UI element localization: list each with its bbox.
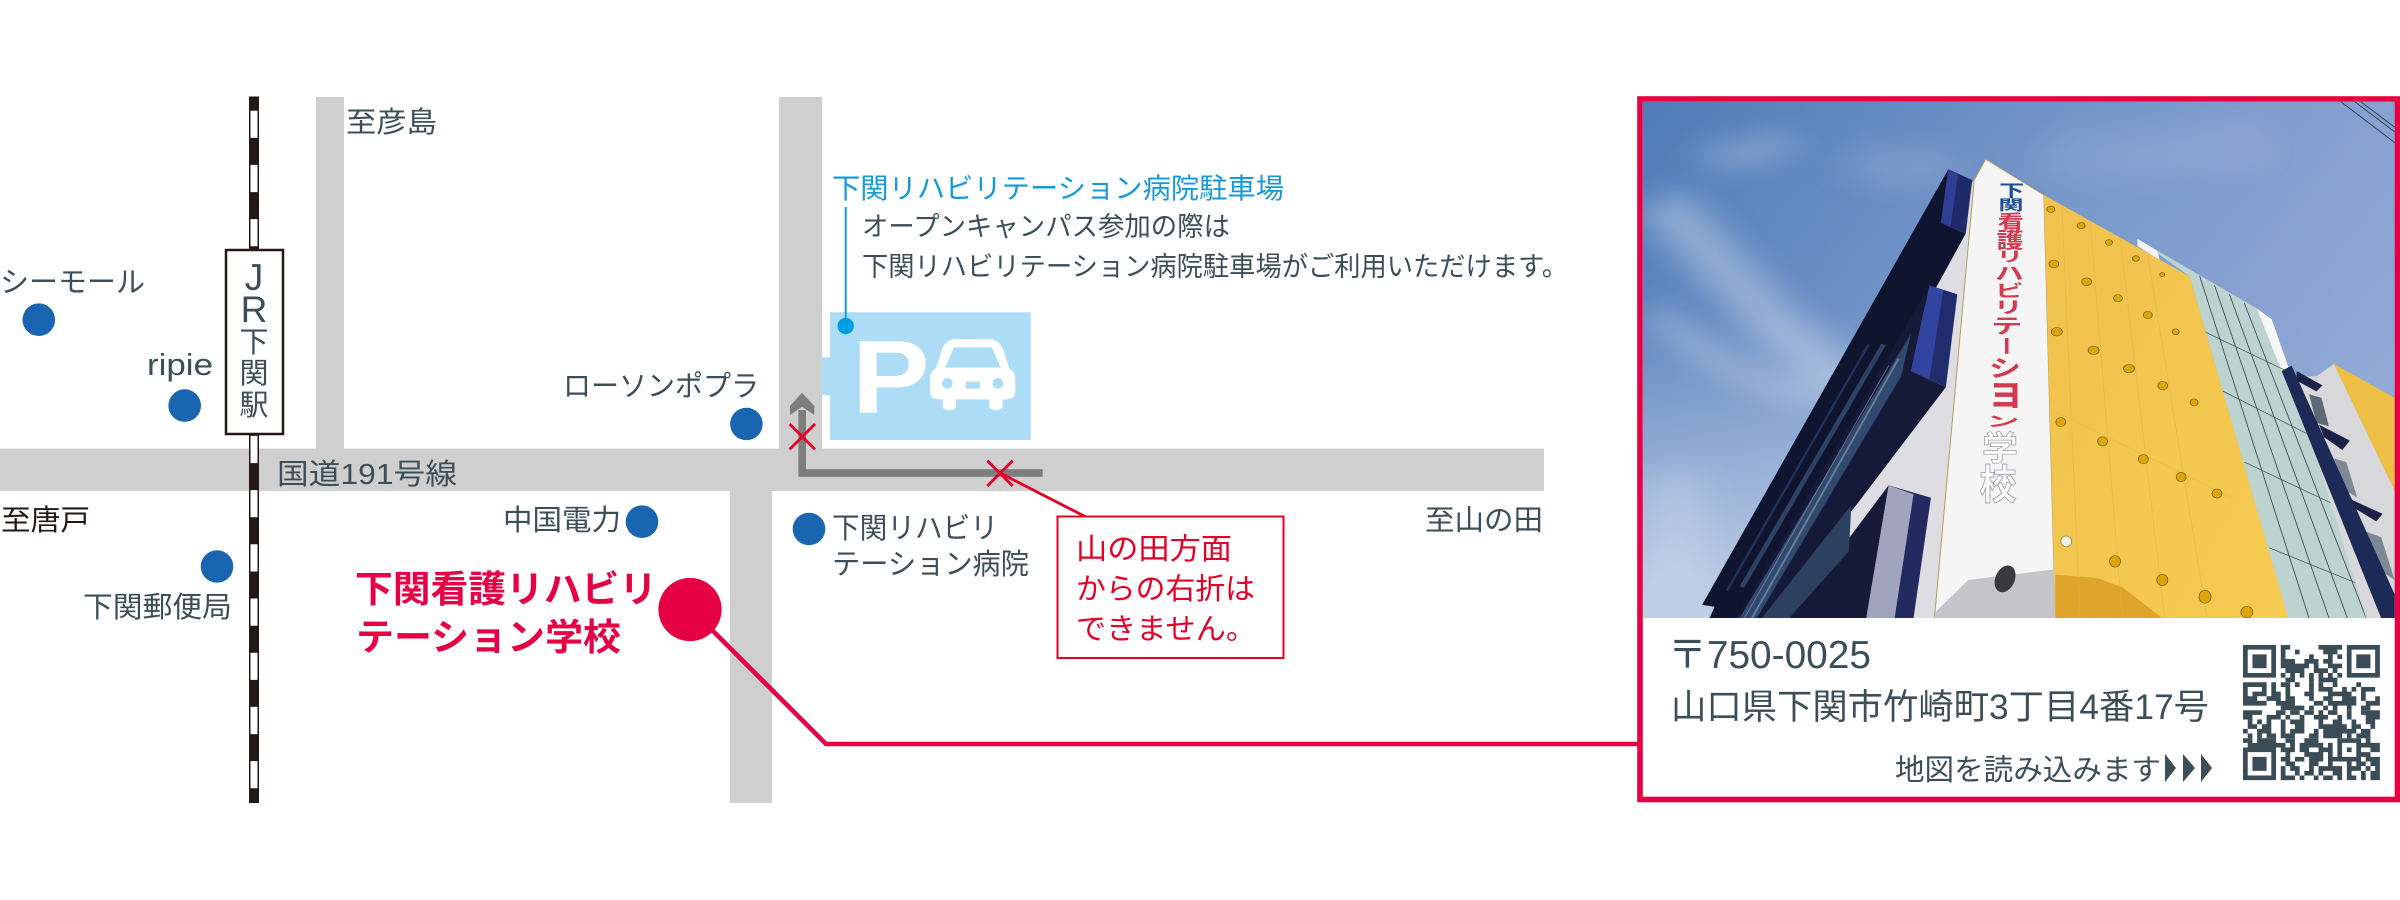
- building sign: リ: [1994, 298, 2023, 316]
- station sign: JR下関駅: J: [245, 257, 263, 298]
- label: ripie with marker: ripie: [147, 347, 213, 382]
- neighbouring building: [2292, 364, 2395, 618]
- dark upper band: [1702, 169, 1966, 618]
- parking pointer: [838, 207, 854, 334]
- address text: 地図を読み込みます: [1895, 754, 2161, 787]
- parking block: [822, 207, 1031, 440]
- callout: no right turn: できません。: [1076, 613, 1256, 646]
- building sign: ン: [1986, 414, 2019, 430]
- building sign: [1979, 183, 2026, 508]
- lower band: [1789, 485, 1889, 618]
- callout: no right turn: 山の田方面: [1076, 533, 1232, 566]
- no-turn mark with leader: [987, 461, 1086, 517]
- building sign: ー: [1992, 336, 2020, 356]
- overhead wires: [2341, 102, 2395, 142]
- label: ローソンポプラ with marker: ローソンポプラ: [563, 370, 759, 403]
- label: シーモール with marker: [0, 267, 145, 336]
- no-entry mark: north road: [790, 424, 815, 449]
- parking note text: [862, 212, 1568, 282]
- band faces: [1941, 169, 1972, 234]
- railway line: [249, 96, 259, 803]
- school marker: [658, 578, 722, 641]
- label: 至彦島: 至彦島: [346, 106, 437, 139]
- panel: school photo and address: [1640, 99, 2398, 800]
- icon: triple arrows: [2165, 754, 2212, 782]
- station sign: JR下関駅: R: [241, 289, 267, 330]
- leader line from school marker to address panel: [690, 608, 1642, 744]
- address text: 山口県下関市竹崎町3丁目4番17号: [1671, 688, 2209, 727]
- school name: 下関看護リハビリ: [355, 569, 657, 610]
- parking note heading: 下関リハビリテーション病院駐車場: [832, 173, 1284, 204]
- station sign: JR下関駅: 下: [239, 327, 269, 359]
- yellow facade: [2044, 195, 2288, 618]
- label: 下関郵便局 with marker: 下関郵便局: [83, 591, 232, 624]
- building sign: 看: [1998, 211, 2024, 232]
- building sign: ョ: [1985, 371, 2026, 414]
- label: 至山の田: 至山の田: [1425, 505, 1543, 537]
- navy column with fins: [2282, 366, 2395, 618]
- station sign: JR下関駅: 駅: [239, 390, 269, 422]
- label: ローソンポプラ with marker: [563, 370, 763, 440]
- building sign: 校: [1979, 463, 2017, 508]
- building sign: ハ: [1995, 264, 2024, 285]
- photo: school building: [1643, 102, 2395, 618]
- parking note text: オープンキャンパス参加の際は: [862, 212, 1230, 242]
- address text: 〒750-0025: [1668, 634, 1871, 677]
- school name: テーション学校: [356, 617, 621, 658]
- security camera: [1994, 566, 2016, 592]
- building sign: ビ: [1995, 282, 2024, 300]
- school name: [355, 569, 657, 658]
- station sign: JR下関駅: [226, 250, 283, 434]
- building sign: 学: [1982, 430, 2018, 468]
- building sign: 関: [1998, 197, 2024, 214]
- address text: [1668, 634, 2209, 787]
- label: 下関リハビリテーション病院 with marker: 下関リハビリ: [832, 513, 998, 545]
- icon: car: [930, 339, 1015, 410]
- route arrow: [790, 393, 1043, 473]
- callout: no right turn: [1058, 516, 1284, 658]
- facade studs: [2047, 206, 2253, 618]
- label: 下関郵便局 with marker: [83, 550, 233, 624]
- station sign: JR下関駅: 関: [239, 358, 269, 390]
- map: road network: [0, 97, 1544, 803]
- building sign: 護: [1997, 228, 2023, 253]
- QR code: [2243, 645, 2380, 780]
- parking note text: 下関リハビリテーション病院駐車場がご利用いただけます。: [862, 252, 1568, 282]
- icon: parking letter P: P: [852, 319, 930, 435]
- panel frame: [1640, 99, 2398, 800]
- building sign: テ: [1991, 315, 2022, 338]
- label: シーモール with marker: シーモール: [0, 267, 145, 299]
- label: ripie with marker: [147, 347, 213, 422]
- label: 至唐戸: 至唐戸: [1, 504, 90, 537]
- callout: no right turn: からの右折は: [1076, 573, 1255, 606]
- glass facade: [2137, 239, 2395, 618]
- label: 下関リハビリテーション病院 with marker: [793, 513, 1029, 581]
- building sign: シ: [1989, 355, 2021, 382]
- left wall: [1850, 180, 1974, 618]
- label: 中国電力 with marker: 中国電力: [503, 504, 621, 537]
- dark middle band: [1737, 285, 1946, 618]
- white strip: [1934, 159, 2055, 618]
- building sign: 下: [1999, 183, 2024, 201]
- label: 下関リハビリテーション病院 with marker: テーション病院: [832, 548, 1029, 581]
- building sign: リ: [1997, 249, 2023, 265]
- label: 国道191号線: 国道191号線: [277, 458, 457, 491]
